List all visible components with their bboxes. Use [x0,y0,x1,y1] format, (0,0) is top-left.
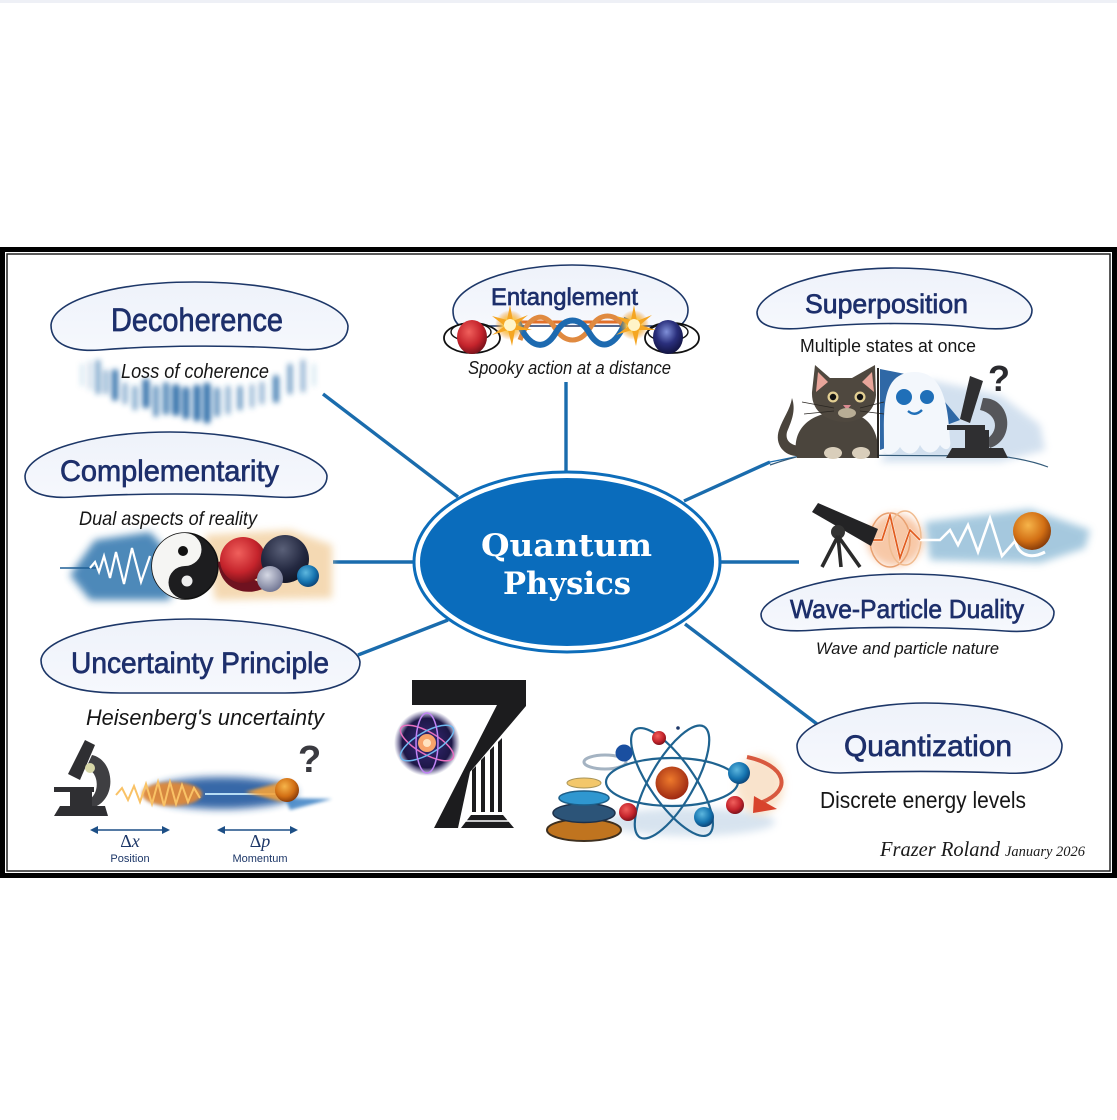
arrow: delta x position [90,826,170,865]
illustration: microscope and streak: ? [298,739,321,781]
microscope [946,376,1008,458]
blurred decoherence waves [82,362,314,420]
illustration: cat, ghost and microscope [770,358,1048,467]
panel: Decoherence [51,282,348,420]
ghost [884,372,950,454]
panel: Uncertainty Principle [41,619,360,865]
arrow: delta p momentum: Momentum [232,853,288,865]
arrow: delta p momentum: Δp [250,831,270,851]
panel: Decoherence: Decoherence [111,302,283,338]
illustration: microscope and streak [54,739,332,816]
panel: Superposition: Superposition [805,289,968,319]
panel: Superposition [757,268,1048,467]
panel: Wave-Particle Duality: Wave and particle nature [816,639,999,658]
stacked energy discs [547,778,621,841]
central node: Quantum Physics: Physics [503,566,631,602]
central node: Quantum Physics [414,472,720,652]
panel: Complementarity: Dual aspects of reality [79,509,258,530]
panel: Quantization [797,703,1062,813]
panel: Uncertainty Principle: Uncertainty Principle [71,647,329,680]
top grey strip [0,0,1117,3]
arrow: delta p momentum [217,826,298,865]
panel: Complementarity: Complementarity [60,455,279,488]
signature: January 2026 [1005,844,1085,860]
illustration: entangled particles and helix [444,305,699,354]
panel: Quantization: Discrete energy levels [820,787,1026,813]
double-line frame [2,250,1114,876]
arrow: delta x position: Position [110,853,150,865]
panel: Quantization: Quantization [844,730,1012,763]
illustration: wave, yin-yang and particles [60,530,332,600]
atom orbits [606,716,738,848]
icon: glowing atom [394,710,460,776]
panel: Wave-Particle Duality [761,503,1090,658]
signature: Frazer Roland [879,837,1000,861]
signature [879,837,1085,861]
connector lines [323,382,817,724]
central node: Quantum Physics: Quantum [481,528,652,564]
panel: Entanglement: Spooky action at a distance [468,358,671,378]
red curved arrow [747,757,782,803]
panel: Superposition: Multiple states at once [800,336,976,356]
logo: 7 with column and atom [394,680,526,828]
illustration: atom and energy levels [547,716,784,848]
panel: Complementarity [25,432,332,600]
illustration: telescope, wave and particle [812,503,1090,567]
panel: Wave-Particle Duality: Wave-Particle Duality [790,594,1024,624]
arrow: delta x position: Δx [120,831,140,851]
panel: Entanglement [444,265,699,378]
panel: Entanglement: Entanglement [491,284,638,311]
panel: Decoherence: Loss of coherence [121,361,269,383]
illustration: cat, ghost and microscope: ? [988,358,1010,399]
panel: Uncertainty Principle: Heisenberg's uncertainty [86,705,326,730]
cat [778,365,884,459]
